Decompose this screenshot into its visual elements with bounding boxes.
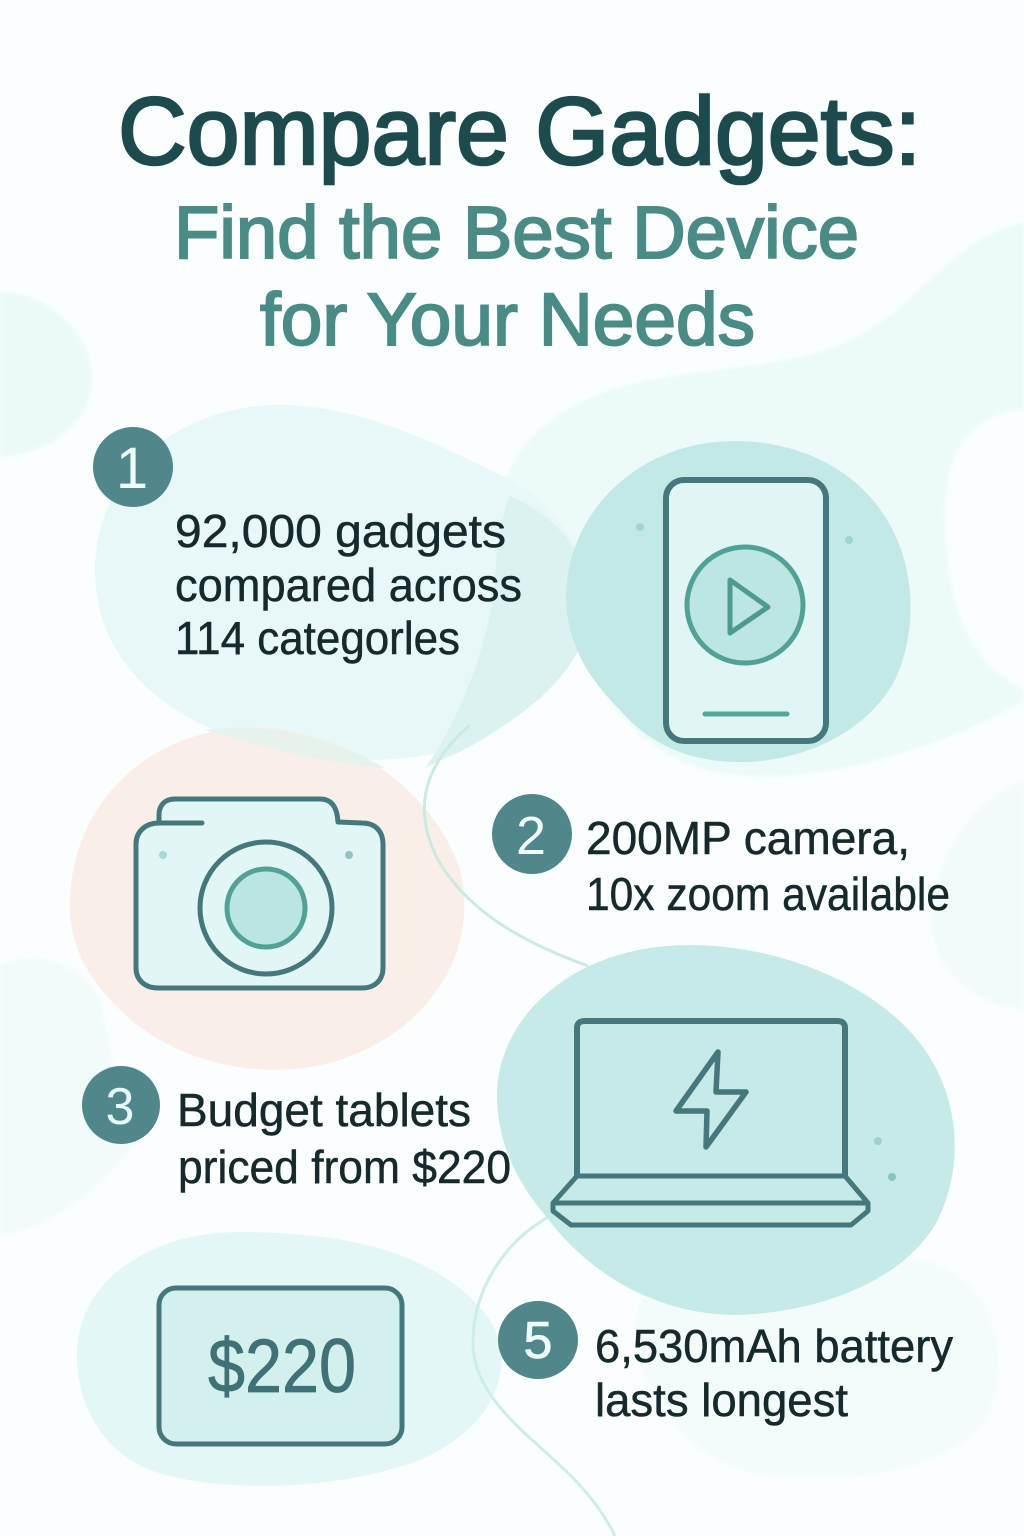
- item 2: text: 10x zoom available: [586, 868, 950, 920]
- blob: camera overlap shade: [205, 728, 385, 768]
- item 5: text: 6,530mAh battery: [595, 1320, 953, 1372]
- connector swoosh lower: [473, 1215, 615, 1536]
- item 5: badge: 5: [524, 1312, 552, 1370]
- item 3: badge: 3: [106, 1078, 134, 1136]
- item 1: text: 92,000 gadgets: [175, 505, 506, 557]
- item 3: badge: [82, 1066, 160, 1144]
- item 1: badge: 1: [116, 436, 148, 501]
- title: Compare Gadgets:: [118, 78, 921, 185]
- connector swoosh upper: [424, 725, 588, 966]
- blob: phone backdrop: [566, 441, 911, 762]
- item 2: badge: 2: [516, 806, 546, 866]
- icon: price tag: $220: [208, 1324, 356, 1409]
- icon: camera: [136, 799, 383, 988]
- item 5: text: lasts longest: [595, 1374, 848, 1426]
- blob: camera backdrop: [70, 728, 464, 1070]
- item 2: text: [586, 812, 950, 920]
- blob: overlap shade: [425, 496, 590, 768]
- item 2: text: 200MP camera,: [586, 812, 910, 864]
- item 1: text: compared across: [175, 559, 522, 611]
- blob: laptop backdrop: [497, 945, 955, 1315]
- blob: price backdrop: [77, 1232, 502, 1486]
- item 1: text: [175, 505, 522, 664]
- subtitle line 2: for Your Needs: [260, 278, 755, 361]
- item 1: badge: [93, 427, 173, 507]
- title: [118, 78, 921, 361]
- item 3: text: Budget tablets: [177, 1084, 471, 1136]
- item 2: badge: [492, 794, 572, 874]
- icon: price tag: [159, 1288, 402, 1444]
- icon: laptop with bolt: [553, 1021, 896, 1225]
- item 3: text: priced from $220: [178, 1141, 511, 1193]
- item 3: text: [177, 1084, 511, 1193]
- icon: phone with play button: [636, 480, 853, 741]
- subtitle line 1: Find the Best Device: [174, 191, 859, 274]
- item 1: text: 114 categorles: [175, 612, 460, 664]
- blob: item 1 backdrop: [95, 405, 590, 760]
- item 5: text: [595, 1320, 953, 1426]
- item 5: badge: [498, 1301, 578, 1379]
